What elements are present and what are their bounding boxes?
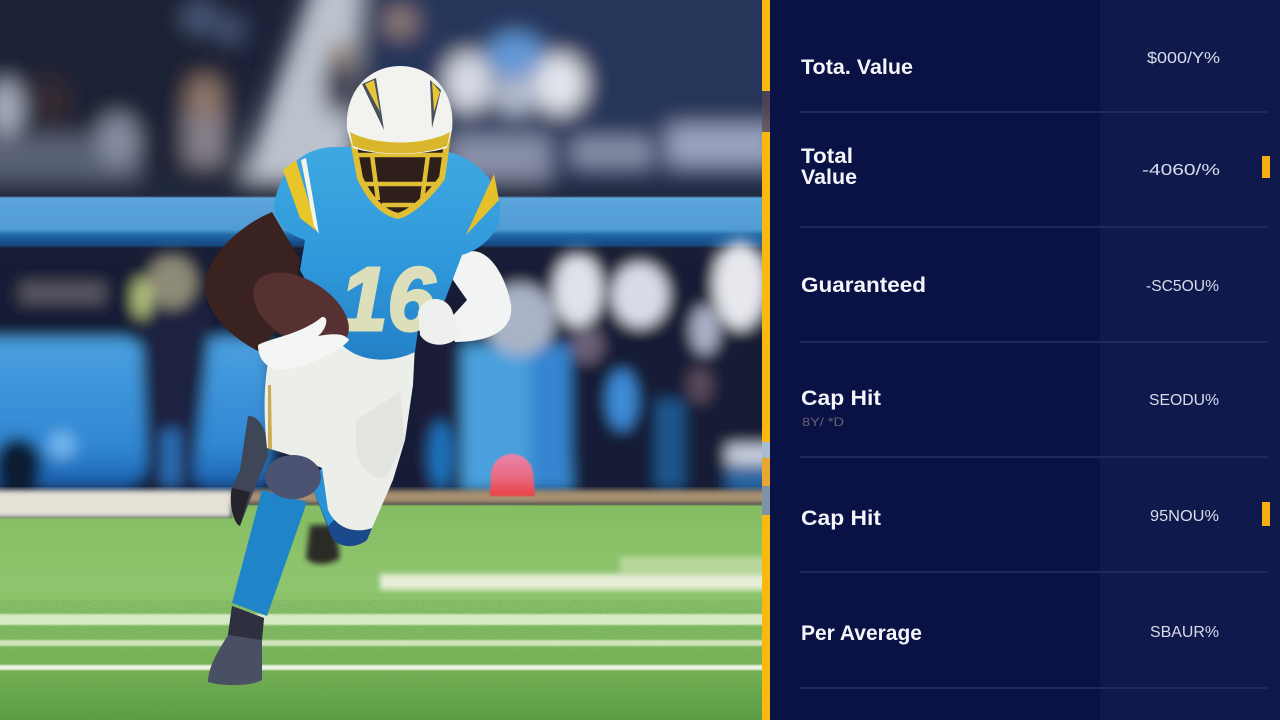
stats panel bbox=[770, 0, 1280, 720]
row 2: Value bbox=[801, 166, 857, 189]
row 2 marker bbox=[1262, 156, 1270, 178]
football bbox=[240, 257, 362, 365]
row 5 bbox=[801, 507, 1219, 530]
sock bbox=[232, 490, 307, 616]
shell bbox=[347, 66, 452, 154]
row 2: -4060/% bbox=[1142, 162, 1220, 179]
sideline bbox=[0, 490, 790, 518]
blue band bbox=[0, 197, 780, 247]
helmet bolts bbox=[362, 78, 384, 130]
left arm bbox=[205, 212, 300, 352]
right glove bbox=[418, 299, 460, 345]
yard lines bbox=[0, 557, 780, 670]
row 2 bbox=[801, 145, 1220, 189]
row 5: Cap Hit bbox=[801, 507, 881, 530]
row 3: -SC5OU% bbox=[1146, 278, 1219, 295]
left glove bbox=[258, 317, 349, 370]
row 5 marker bbox=[1262, 502, 1270, 526]
jersey number: 16 bbox=[340, 250, 436, 350]
row 4 bbox=[801, 387, 1219, 429]
row 4: Cap Hit bbox=[801, 387, 881, 410]
row 2: Total bbox=[801, 145, 853, 168]
row 1: $000/Y% bbox=[1147, 50, 1220, 67]
pants stripe bbox=[268, 385, 272, 450]
back cleat bbox=[231, 416, 268, 526]
row 3 bbox=[801, 274, 1219, 297]
row 3: Guaranteed bbox=[801, 274, 926, 297]
row 4: 8Y/ *D bbox=[802, 415, 844, 429]
front cleat bbox=[208, 606, 264, 685]
right arm bbox=[447, 251, 511, 342]
accent bar strip bbox=[762, 0, 770, 720]
facemask bbox=[352, 135, 448, 216]
row 4: SEODU% bbox=[1149, 392, 1219, 409]
pants bbox=[265, 345, 415, 530]
back foot blurred bbox=[306, 525, 340, 564]
back leg sock bbox=[310, 468, 372, 546]
row 1: Tota. Value bbox=[801, 56, 913, 79]
grass texture bbox=[0, 600, 762, 720]
helmet bbox=[347, 66, 452, 216]
background figures and wall bbox=[0, 241, 800, 500]
red pylon bbox=[490, 454, 535, 496]
row 6: Per Average bbox=[801, 622, 922, 645]
knee pad bbox=[265, 455, 321, 499]
photo background: stadium and field bbox=[0, 0, 802, 720]
row 1 bbox=[801, 50, 1220, 79]
row 5: 95NOU% bbox=[1150, 508, 1219, 525]
field bbox=[0, 505, 780, 720]
row 6 bbox=[801, 622, 1219, 645]
stands crowd bbox=[0, 0, 802, 200]
player bbox=[205, 66, 511, 685]
jersey bbox=[274, 147, 500, 360]
row 6: SBAUR% bbox=[1150, 624, 1219, 641]
shoulder stripes bbox=[283, 160, 318, 232]
